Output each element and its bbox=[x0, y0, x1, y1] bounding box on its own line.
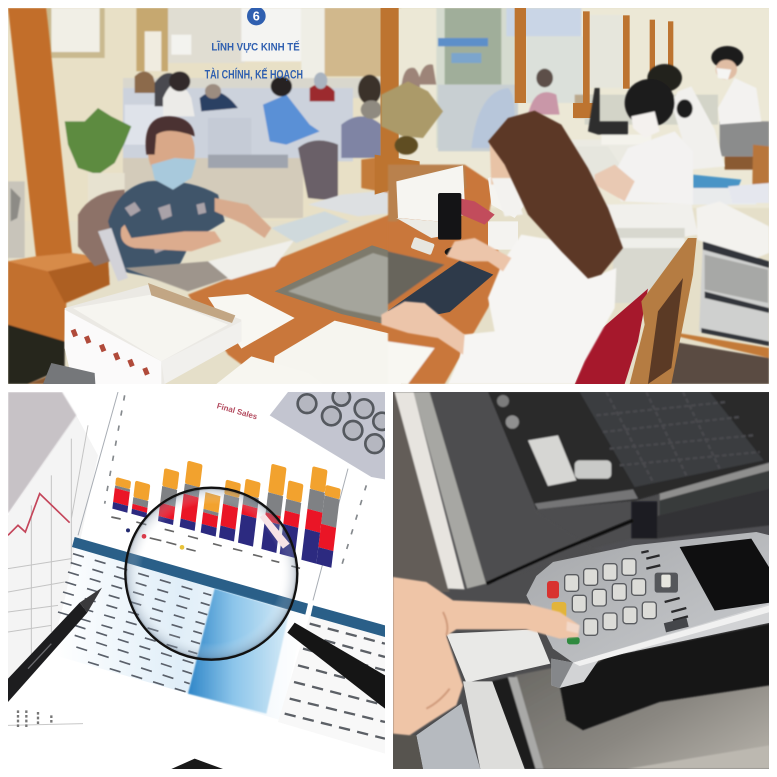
terminal base bbox=[560, 624, 770, 730]
seated customer bbox=[78, 116, 271, 281]
dried flower arrangement bbox=[381, 81, 443, 155]
background grid sheet bbox=[8, 415, 98, 685]
sheet fold and stray marks bbox=[8, 710, 223, 769]
clerk hair bbox=[488, 111, 623, 279]
counter posts bbox=[375, 8, 673, 195]
function buttons bbox=[641, 551, 689, 632]
back clerks bbox=[595, 46, 761, 205]
terminal screen bbox=[680, 539, 770, 611]
right side desk stacks bbox=[571, 88, 769, 384]
counter papers and top bbox=[125, 155, 401, 384]
the waiting visitors group is painted here bbox=[135, 71, 158, 93]
calculator bbox=[270, 388, 391, 479]
terminal silver case bbox=[526, 532, 770, 688]
left wood post and base bbox=[8, 8, 110, 384]
glass counter window bbox=[274, 246, 389, 324]
counter stand and phone bbox=[396, 165, 525, 257]
clerk face and mask bbox=[490, 141, 511, 185]
hand pressing key bbox=[393, 577, 580, 735]
clerk arms bbox=[446, 238, 511, 271]
counter pieces under hand bbox=[393, 681, 525, 769]
laptop body bbox=[488, 392, 770, 509]
the potted plant is painted here bbox=[65, 108, 131, 175]
grey metal strip bbox=[414, 392, 486, 589]
sign text: 6 bbox=[253, 10, 260, 24]
power cable bbox=[660, 463, 770, 516]
keypad bbox=[565, 559, 656, 635]
main data table bbox=[55, 537, 308, 720]
receipt paper bbox=[446, 629, 550, 683]
chart legend bbox=[111, 517, 300, 568]
chart axis bbox=[78, 392, 348, 600]
photo: financial charts under magnifier bbox=[8, 388, 391, 769]
post beside clerk bbox=[380, 8, 381, 156]
bottom right papers bbox=[271, 321, 401, 384]
sign text bbox=[205, 7, 303, 82]
right data table bbox=[284, 605, 385, 740]
table surface bbox=[515, 625, 770, 769]
coloured keys bbox=[547, 581, 580, 644]
chart title: Final Sales bbox=[216, 401, 259, 422]
magnifier lens bbox=[125, 487, 298, 660]
grey folded paper bbox=[8, 392, 76, 514]
chair bbox=[575, 238, 697, 384]
left backdrop bbox=[393, 392, 450, 592]
sign text: LĨNH VỰC KINH TẾ bbox=[211, 41, 300, 54]
stacked bar chart bbox=[112, 461, 341, 568]
chart scale labels bbox=[105, 395, 366, 572]
main clerk bbox=[381, 111, 623, 384]
sign text: TÀI CHÍNH, KẾ HOẠCH bbox=[205, 67, 303, 82]
main counter top bbox=[388, 165, 505, 384]
photo: card payment terminal bbox=[393, 392, 770, 769]
white strip bbox=[395, 392, 465, 589]
magnifier handle bbox=[287, 623, 385, 709]
small paper on counter bbox=[208, 294, 295, 349]
clerk shirt bbox=[448, 235, 616, 384]
photo: office service counter bbox=[8, 7, 771, 384]
keyboard bbox=[388, 260, 494, 314]
pen bbox=[8, 588, 102, 702]
white document box bbox=[43, 283, 241, 384]
